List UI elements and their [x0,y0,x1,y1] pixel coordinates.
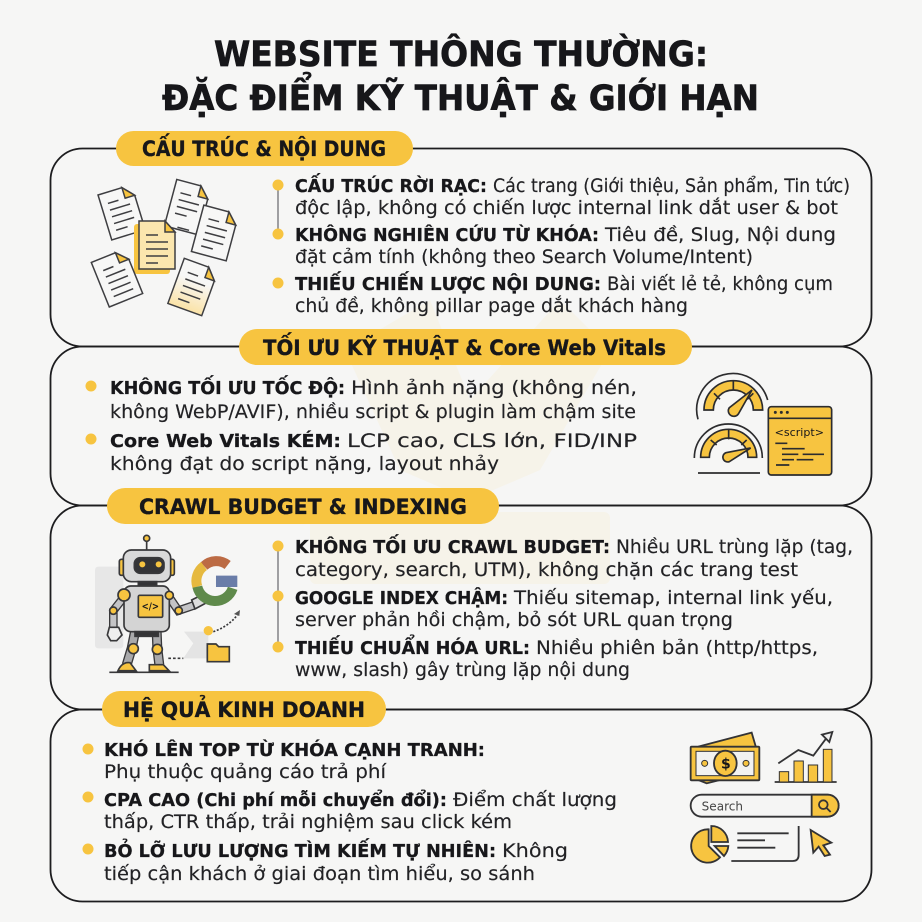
icon: money, chart, search bar, pie chart, cursor: Search [702,798,743,813]
timeline bullets [272,540,284,652]
text: cpa cao: CPA CAO (Chi phí mỗi chuyển đổi): [104,789,447,811]
text: google index chậm [295,587,833,631]
text: không nghiên cứu từ khóa: KHÔNG NGHIÊN CỨU TỪ KHÓA: [295,224,599,246]
text: google index chậm: GOOGLE INDEX CHẬM: [295,587,508,609]
text: khó lên top: KHÓ LÊN TOP TỪ KHÓA CẠNH TRANH: [104,739,485,761]
icon: speed gauges and script window: <script> [775,427,824,439]
text: không tối ưu tốc độ [110,375,637,423]
panel: tối ưu kỹ thuật [50,329,872,506]
text: cpa cao: Điểm chất lượng [453,789,617,811]
heading: hệ quả kinh doanh [102,691,386,727]
text: thiếu chiến lược nội dung: chủ đề, không pillar page dắt khách hàng [295,294,688,317]
text: không tối ưu crawl budget: KHÔNG TỐI ƯU CRAWL BUDGET: [295,534,610,558]
text: thiếu chiến lược nội dung: THIẾU CHIẾN LƯỢC NỘI DUNG: [295,271,601,295]
heading: tối ưu kỹ thuật & core web vitals [239,329,692,365]
text: core web vitals kém: không đạt do script nặng, layout nhảy [110,453,499,475]
text: không tối ưu crawl budget: Nhiều URL trùng lặp (tag, [616,536,853,558]
heading: crawl budget & indexing: CRAWL BUDGET & INDEXING [139,495,467,519]
text: khó lên top: Phụ thuộc quảng cáo trả phí [104,761,387,783]
text: core web vitals kém [110,430,637,475]
text: bỏ lỡ lưu lượng [104,838,568,885]
text: thiếu chuẩn hóa url: www, slash) gây trùng lặp nội dung [295,659,630,681]
text: google index chậm: server phản hồi chậm, bỏ sót URL quan trọng [295,609,733,631]
icon: scattered documents [91,179,239,316]
text: không nghiên cứu từ khóa [295,224,836,268]
text: cấu trúc rời rạc: độc lập, không có chiến lược internal link dắt user & bot [295,196,838,219]
text: thiếu chiến lược nội dung: Bài viết lẻ tẻ, không cụm [607,273,833,295]
text: khó lên top [104,739,485,783]
icon: robot holding google g: </> [142,602,159,613]
heading: tối ưu kỹ thuật & core web vitals: TỐI ƯU KỸ THUẬT & Core Web Vitals [263,332,666,360]
text: không tối ưu tốc độ: Hình ảnh nặng (không nén, [351,377,637,399]
heading: cấu trúc & nội dung: CẤU TRÚC & NỘI DUNG [142,133,386,161]
text: core web vitals kém: Core Web Vitals KÉM: [110,430,341,452]
text: không nghiên cứu từ khóa: đặt cảm tính (không theo Search Volume/Intent) [295,246,753,268]
title [162,33,759,119]
text: google index chậm: Thiếu sitemap, internal link yếu, [513,587,833,609]
heading: crawl budget & indexing [107,488,499,524]
text: không tối ưu tốc độ: KHÔNG TỐI ƯU TỐC ĐỘ: [110,375,345,399]
text: cấu trúc rời rạc [295,173,850,219]
heading: cấu trúc & nội dung [116,131,413,166]
text: không tối ưu crawl budget [295,534,853,581]
text: bỏ lỡ lưu lượng: BỎ LỠ LƯU LƯỢNG TÌM KIẾM TỰ NHIÊN: [104,838,496,862]
text: cấu trúc rời rạc: Các trang (Giới thiệu, Sản phẩm, Tin tức) [493,175,850,197]
text: cpa cao [104,789,617,833]
text: không nghiên cứu từ khóa: Tiêu đề, Slug, Nội dung [604,224,836,246]
text: thiếu chuẩn hóa url: Nhiều phiên bản (http/https, [536,637,818,659]
text: cấu trúc rời rạc: CẤU TRÚC RỜI RẠC: [295,173,487,197]
icon: robot holding google g [95,535,240,672]
text: cpa cao: thấp, CTR thấp, trải nghiệm sau click kém [104,811,512,833]
text: không tối ưu crawl budget: category, search, UTM), không chặn các trang test [295,559,798,581]
text: bỏ lỡ lưu lượng: Không [502,840,568,862]
timeline bullets [272,180,284,288]
panel: hệ quả kinh doanh [50,691,872,902]
bullets [86,380,96,444]
icon: speed gauges and script window [694,374,832,475]
heading: hệ quả kinh doanh: HỆ QUẢ KINH DOANH [123,695,365,722]
title: ĐẶC ĐIỂM KỸ THUẬT & GIỚI HẠN [162,71,759,119]
icon: money, chart, search bar, pie chart, cursor: $ [721,757,731,773]
text: thiếu chuẩn hóa url: THIẾU CHUẨN HÓA URL: [295,634,530,659]
text: core web vitals kém: LCP cao, CLS lớn, FID/INP [347,430,637,452]
text: không tối ưu tốc độ: không WebP/AVIF), nhiều script & plugin làm chậm site [110,401,636,423]
title: WEBSITE THÔNG THƯỜNG: [214,33,708,75]
panel: cấu trúc & nội dung [50,131,872,346]
text: thiếu chiến lược nội dung [295,271,833,317]
text: thiếu chuẩn hóa url [295,634,818,681]
icon: money, chart, search bar, pie chart, cursor [691,732,839,863]
panel: crawl budget & indexing [50,488,872,710]
text: bỏ lỡ lưu lượng: tiếp cận khách ở giai đoạn tìm hiểu, so sánh [104,863,535,885]
bullets [82,744,94,854]
